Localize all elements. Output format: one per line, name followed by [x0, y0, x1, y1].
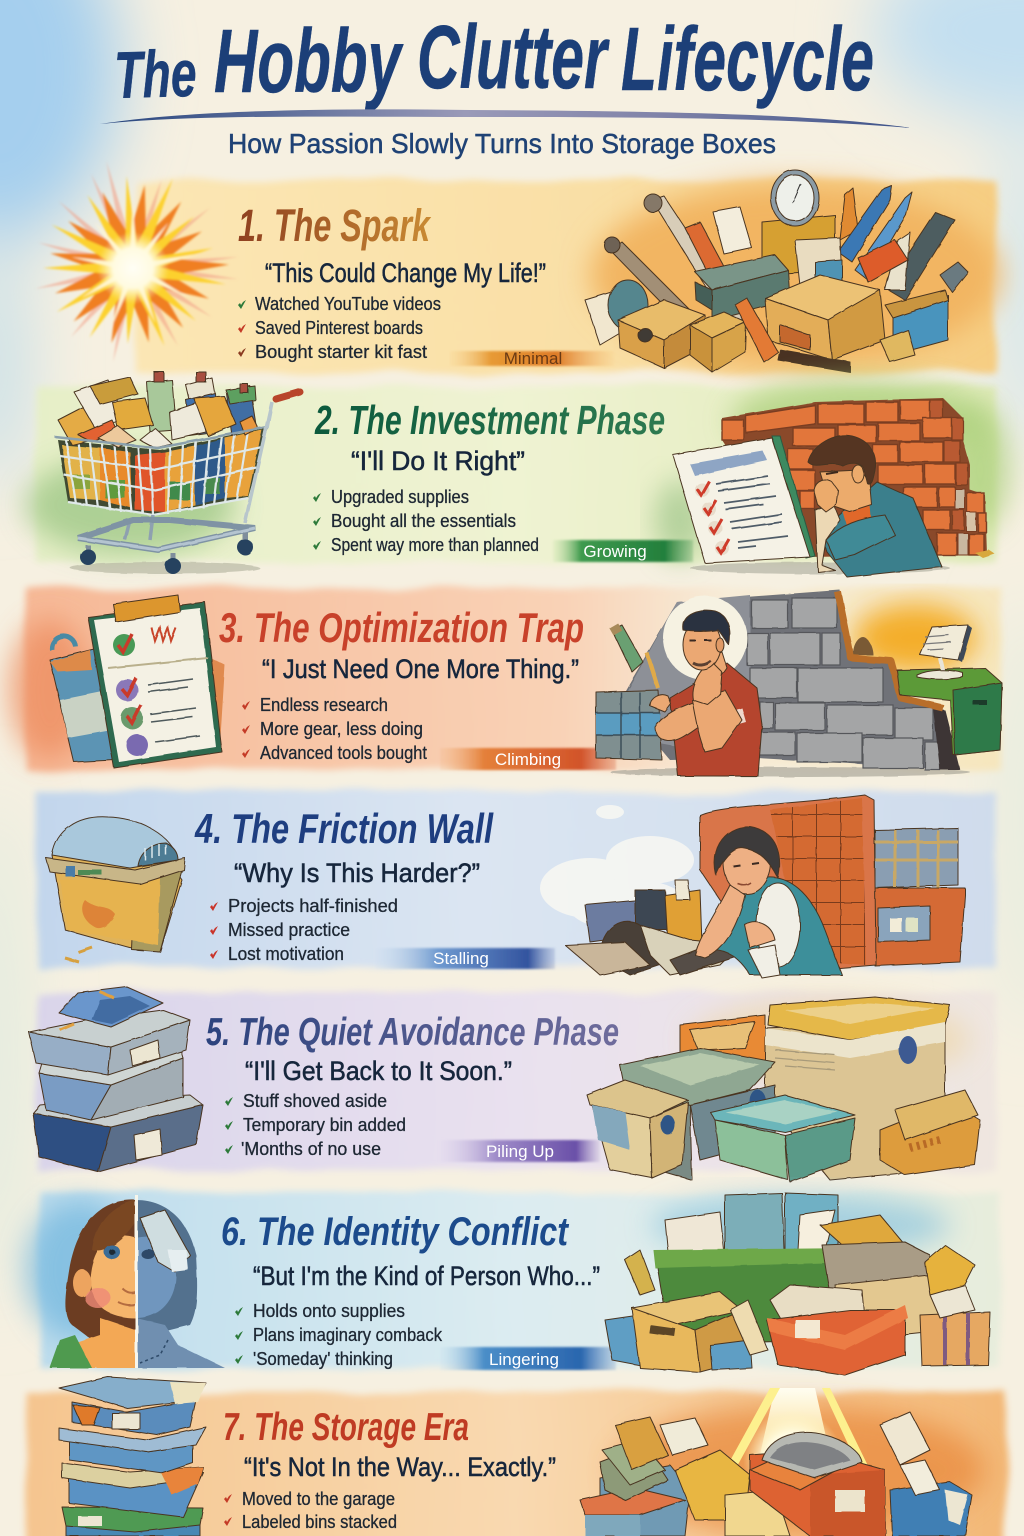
level pill: Minimal: Minimal — [504, 349, 562, 368]
icon: shopping cart — [55, 372, 300, 574]
illustration backdrop — [590, 183, 1000, 367]
light rays — [725, 1388, 870, 1510]
level pill: Climbing — [440, 748, 616, 770]
illustration: orange wall, resting person, clutter — [565, 795, 965, 978]
bullet list: Watched YouTube videos — [255, 294, 441, 314]
level pill: Growing: Growing — [583, 542, 647, 561]
illustration: stone wall, thoughtful man, desk — [596, 590, 1002, 777]
quote: “I'll Get Back to It Soon.” — [245, 1056, 512, 1086]
bullet list: Saved Pinterest boards — [255, 318, 423, 338]
bullet list: Labeled bins stacked — [242, 1512, 397, 1532]
icon: split face — [50, 1195, 225, 1368]
illustration: pile of hobby gear — [585, 170, 968, 372]
title: Lifecycle — [621, 10, 874, 110]
panel wash — [36, 792, 996, 967]
quote: “It's Not In the Way... Exactly.” — [244, 1452, 556, 1482]
illustration: brick wall, checklist, worried person — [673, 398, 995, 577]
heading: 5. The Quiet Avoidance Phase — [206, 1011, 619, 1054]
bullet list: Bought starter kit fast — [255, 342, 427, 362]
bullet list — [313, 487, 539, 555]
panel: 4 The Friction Wall — [36, 792, 996, 978]
illustration backdrop — [650, 1195, 950, 1255]
bullet list — [210, 896, 398, 964]
panel: 3 The Optimization Trap — [10, 588, 1002, 777]
level pill: Stalling — [375, 948, 555, 969]
illustration backdrop: yellow wash — [853, 604, 977, 672]
title: Clutter — [417, 8, 610, 108]
panel wash — [36, 386, 996, 562]
level pill: Stalling: Stalling — [433, 949, 489, 968]
bullet list: Temporary bin added — [243, 1115, 406, 1135]
illustration: glowing storage pile — [580, 1412, 972, 1536]
quote: “I'll Do It Right” — [351, 446, 525, 476]
title: The — [113, 36, 197, 112]
bullet list: 'Someday' thinking — [253, 1349, 393, 1369]
level pill: Piling Up: Piling Up — [486, 1142, 554, 1161]
quote: “Why Is This Harder?” — [234, 858, 480, 888]
heading: 3. The Optimization Trap — [219, 604, 584, 651]
icon: yellow bin — [46, 817, 185, 962]
illustration backdrop: left salmon wash — [10, 620, 90, 760]
bullet list — [238, 294, 441, 362]
bullet list: Upgraded supplies — [331, 487, 469, 507]
panel wash — [135, 180, 995, 372]
quote: “This Could Change My Life!” — [265, 258, 546, 288]
quote: “I Just Need One More Thing.” — [262, 654, 579, 684]
panel: 1 The Spark — [34, 160, 1000, 372]
panel wash — [26, 1392, 1006, 1536]
bullet list: 'Months of no use — [241, 1139, 381, 1159]
level pill: Growing — [553, 540, 693, 562]
heading: 2. The Investment Phase — [314, 397, 665, 443]
icon: stacked blue bins — [29, 987, 203, 1172]
title — [113, 8, 874, 112]
panel wash — [36, 992, 996, 1170]
bullet list: Bought all the essentials — [331, 511, 516, 531]
bullet list: Plans imaginary comback — [253, 1325, 443, 1345]
bullet list — [225, 1091, 406, 1159]
subtitle: How Passion Slowly Turns Into Storage Boxes — [228, 128, 776, 159]
heading: 1. The Spark — [238, 200, 431, 251]
title: Hobby — [214, 12, 404, 112]
illustration: large pile of bins and boxes — [587, 997, 980, 1182]
quote: “But I'm the Kind of Person Who...” — [253, 1261, 600, 1291]
icon: sun burst — [34, 160, 239, 363]
illustration backdrop: small clouds — [540, 805, 694, 931]
bullet list: More gear, less doing — [260, 719, 423, 739]
bullet list — [224, 1489, 397, 1532]
bullet list: Advanced tools bought — [260, 743, 427, 763]
illustration backdrop — [690, 1000, 970, 1080]
level pill: Lingering: Lingering — [489, 1350, 559, 1369]
bullet list: Missed practice — [228, 920, 350, 940]
icon: tall stack of bins — [59, 1377, 206, 1536]
panel: 6 The Identity Conflict — [25, 1192, 1000, 1375]
illustration: overflowing bins and cartons — [605, 1193, 990, 1375]
heading: 7. The Storage Era — [223, 1406, 469, 1449]
heading: 4. The Friction Wall — [194, 805, 494, 852]
bullet list: Stuff shoved aside — [243, 1091, 387, 1111]
level pill: Lingering — [440, 1347, 616, 1370]
bullet list — [242, 695, 427, 763]
bullet list — [235, 1301, 443, 1369]
panel: 2 The Investment Phase — [25, 372, 1010, 577]
level pill: Minimal — [450, 349, 614, 368]
panel wash — [26, 588, 1001, 770]
bullet list: Spent way more than planned — [331, 535, 539, 555]
bullet list: Moved to the garage — [242, 1489, 395, 1509]
level pill: Piling Up — [440, 1140, 600, 1162]
icon: clipboard and bin — [50, 595, 225, 768]
bullet list: Endless research — [260, 695, 388, 715]
level pill: Climbing: Climbing — [495, 750, 561, 769]
illustration backdrop — [730, 380, 990, 460]
bullet list: Lost motivation — [228, 944, 344, 964]
panel wash — [40, 1192, 1000, 1368]
panel: 7 The Storage Era — [26, 1377, 1006, 1536]
bullet list: Projects half-finished — [228, 896, 398, 916]
illustration backdrop — [615, 1405, 985, 1535]
title underline swoosh — [100, 109, 911, 128]
panel: 5 The Quiet Avoidance Phase — [29, 987, 996, 1182]
bullet list: Holds onto supplies — [253, 1301, 405, 1321]
heading: 6. The Identity Conflict — [221, 1210, 569, 1254]
